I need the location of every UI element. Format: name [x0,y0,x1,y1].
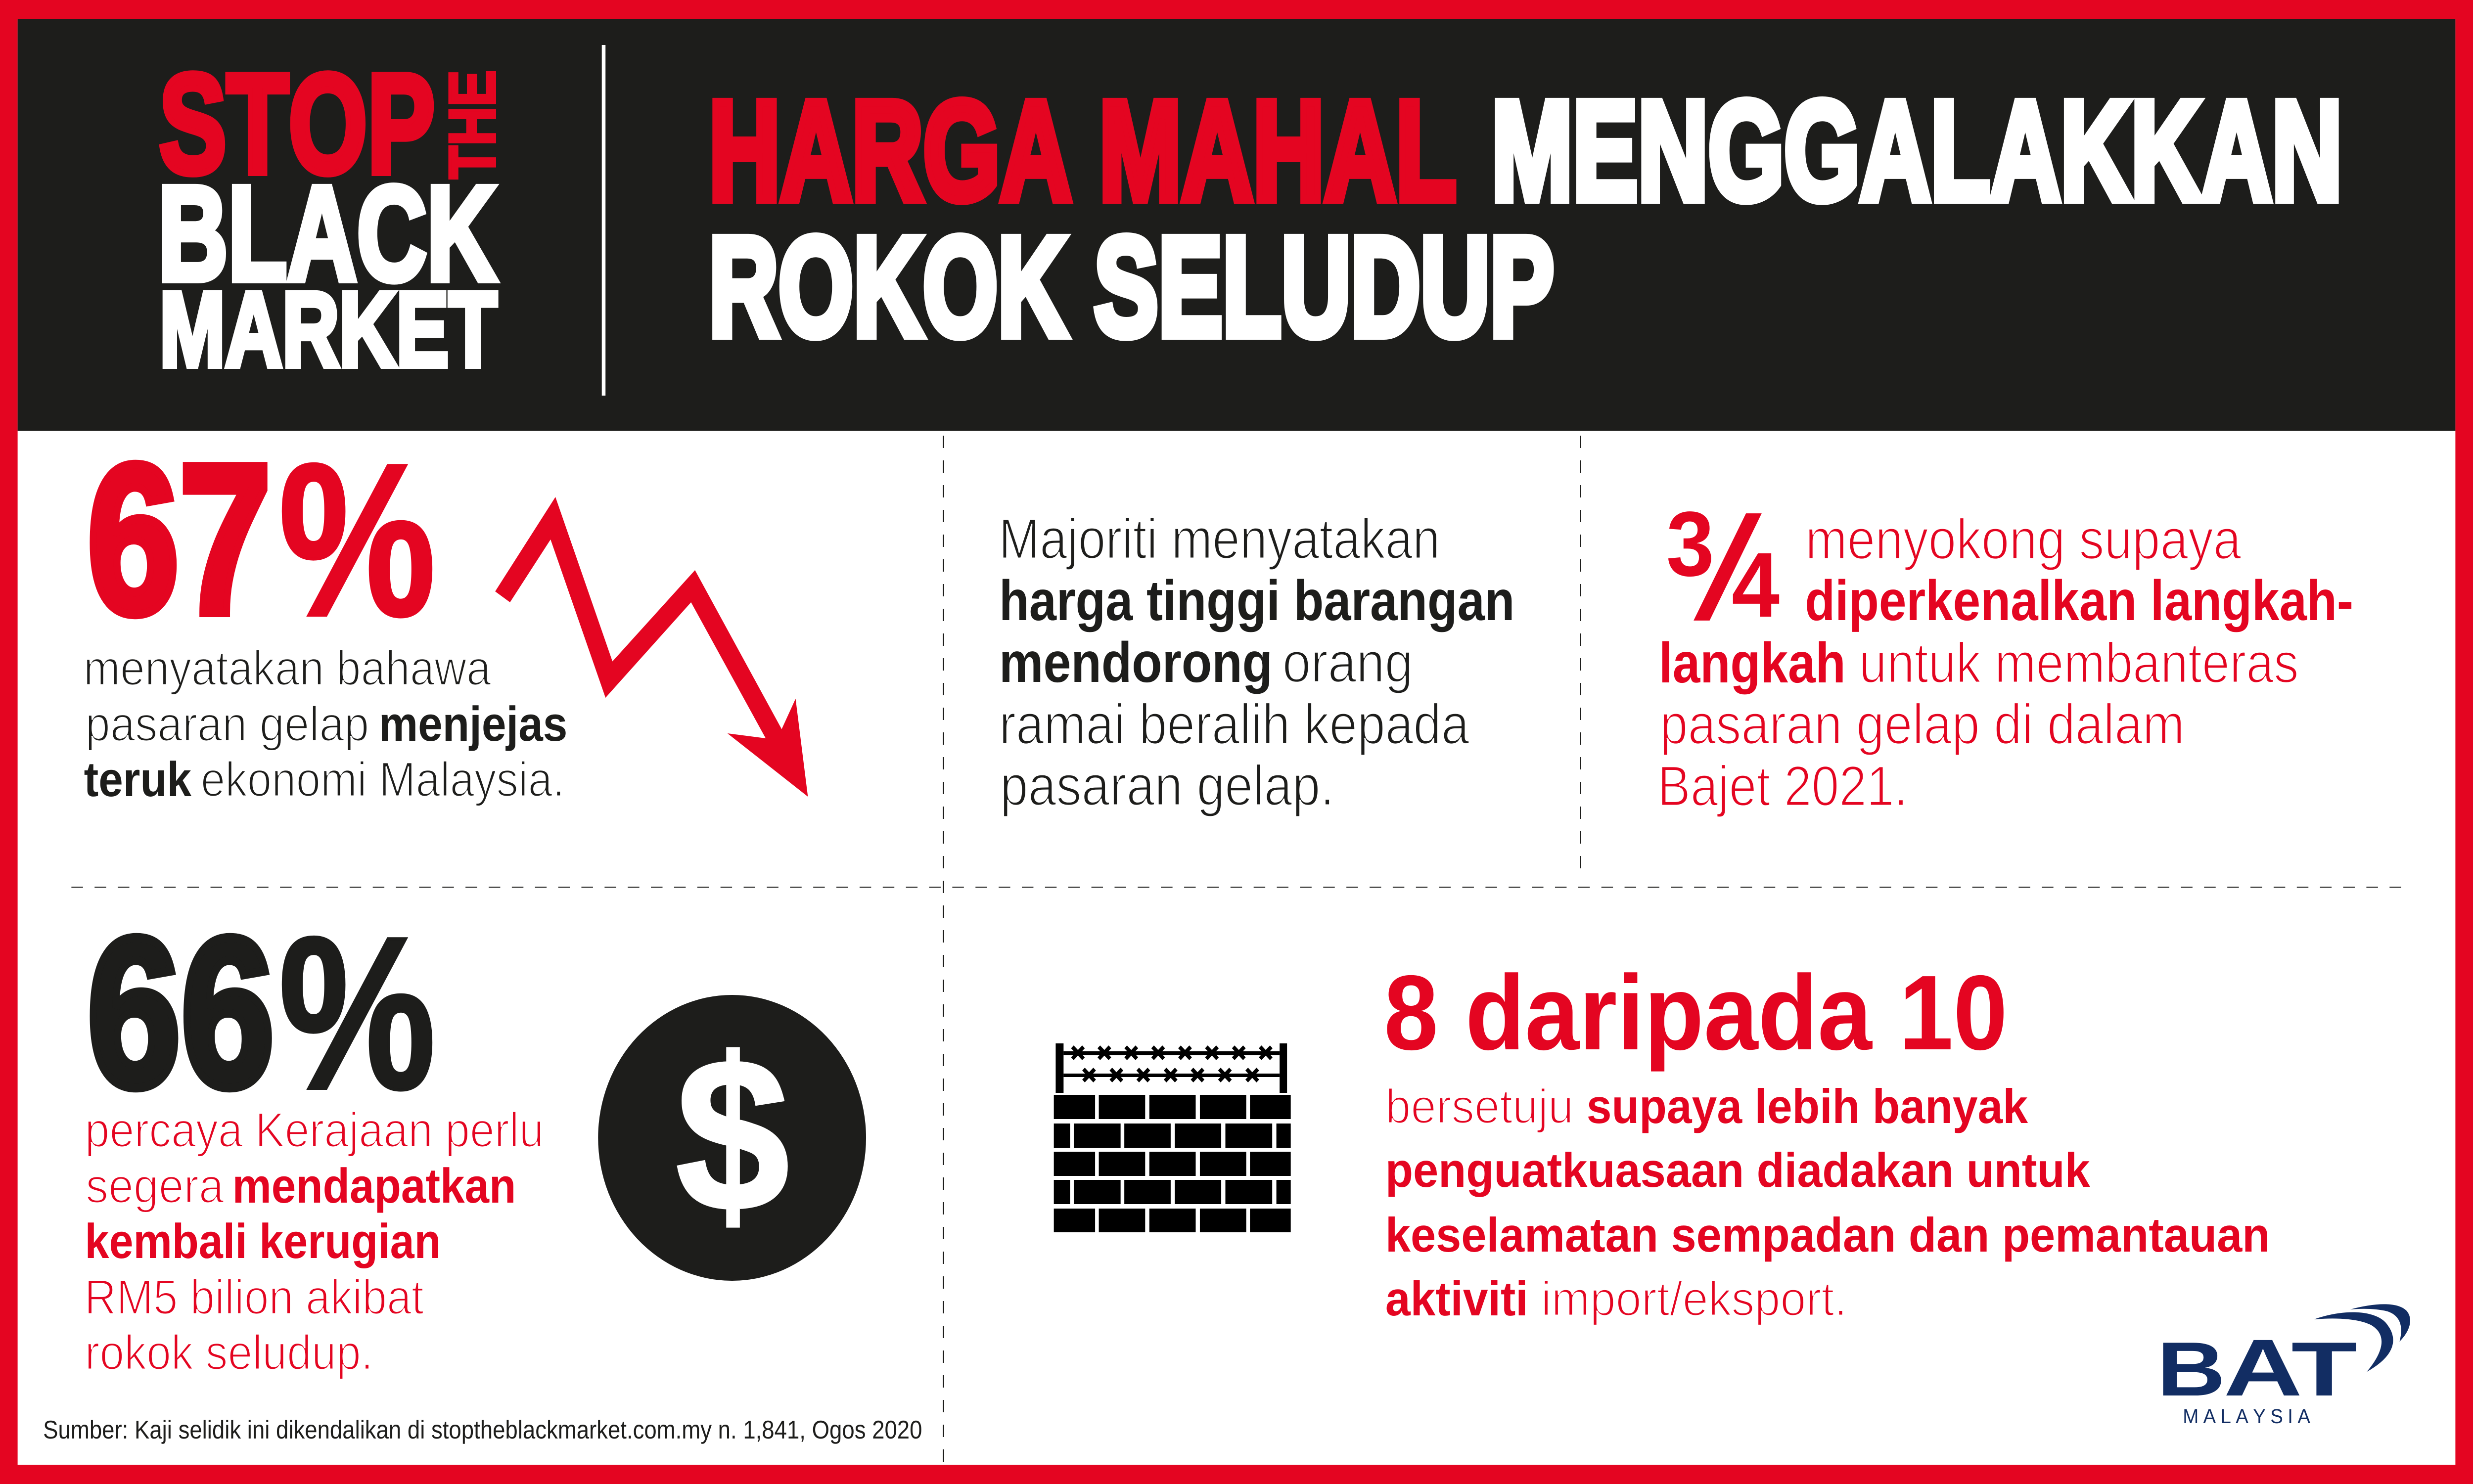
logo: Stop the Black Market: STOP [159,45,435,203]
text: enforcement [1385,1079,2270,1326]
headline: ROKOK SELUDUP [709,208,1554,365]
heading: 8 daripada 10: 8 daripada 10 [1384,953,2008,1072]
source note: Sumber: Kaji selidik ini dikendalikan di stoptheblackmarket.com.my n. 1,841, Ogos 2020 [43,1416,922,1444]
text: budget measures: langkah [1659,631,1846,695]
text: economy impact: teruk [84,752,192,807]
text: recover losses: kembali kerugian [85,1214,441,1268]
text: economy impact: menjejas [379,696,567,751]
text: budget measures [1657,508,2353,818]
text: recover losses: mendapatkan [232,1158,516,1213]
statistic 66% [87,892,436,1135]
logo: Stop the Black Market: BLACK [158,158,497,309]
logo: Stop the Black Market: THE [435,70,508,179]
icon: dollar coin [598,995,866,1281]
panel: majority statement: pasaran gelap. [1000,754,1334,817]
logo: BAT Malaysia: B [2157,1326,2225,1412]
panel: majority statement [999,507,1514,817]
text: economy impact: ekonomi Malaysia. [201,752,565,807]
text: recover losses [85,1102,544,1380]
text: enforcement: keselamatan sempadan dan pemantauan [1385,1208,2270,1262]
text: economy impact: menyatakan bahawa [84,640,492,695]
panel: majority statement: orang [1282,631,1413,694]
text: economy impact [84,640,567,807]
statistic 66%: 66 [87,894,275,1131]
panel: majority statement: ramai beralih kepada [999,693,1469,756]
header band [18,19,2455,431]
panel: 67 percent [84,419,808,807]
logo: BAT Malaysia: MALAYSIA [2183,1405,2311,1428]
icon: falling arrow [495,497,808,797]
text: enforcement: import/eksport. [1541,1271,1847,1326]
statistic 3/4: 4 [1732,534,1780,636]
statistic 67%: 67 [87,421,271,658]
panel: 8 out of 10 [1384,953,2270,1326]
headline: HARGA MAHAL [709,72,1456,229]
panel: majority statement: mendorong [999,631,1273,694]
text: recover losses: percaya Kerajaan perlu [85,1102,544,1157]
statistic 66%: % [278,892,436,1135]
statistic 67%: % [278,419,436,662]
text: budget measures: pasaran gelap di dalam [1660,693,2185,756]
statistic 3/4: / [1684,488,1772,648]
statistic 67% [87,419,436,662]
text: economy impact: pasaran gelap [85,696,369,751]
panel: 66 percent [85,892,866,1380]
icon: dollar coin: $ [676,1014,789,1257]
text: recover losses: rokok seludup. [85,1325,373,1380]
text: budget measures: diperkenalkan langkah- [1805,569,2353,632]
text: enforcement: penguatkuasaan diadakan untuk [1385,1143,2090,1197]
text: recover losses: RM5 bilion akibat [85,1269,424,1324]
logo: BAT Malaysia: T [2291,1326,2357,1412]
logo: BAT Malaysia [2157,1304,2410,1428]
text: budget measures: menyokong supaya [1805,508,2241,571]
icon: brick wall with barbed wire [1054,1043,1291,1232]
panel: majority statement: harga tinggi barangan [999,569,1514,632]
panel: three quarters [1657,488,2353,818]
logo: BAT Malaysia: A [2224,1322,2302,1413]
statistic 3/4: 3 [1666,493,1714,595]
panel: majority statement: Majoriti menyatakan [999,507,1440,571]
text: enforcement: supaya lebih banyak [1587,1079,2028,1133]
text: budget measures: untuk membanteras [1859,631,2299,695]
logo: Stop the Black Market [158,45,508,389]
text: enforcement: bersetuju [1385,1079,1573,1133]
headline [709,72,2342,365]
text: recover losses: segera [86,1158,225,1213]
text: enforcement: aktiviti [1385,1271,1528,1326]
text: budget measures: Bajet 2021. [1657,755,1908,818]
logo: Stop the Black Market: MARKET [159,270,497,389]
